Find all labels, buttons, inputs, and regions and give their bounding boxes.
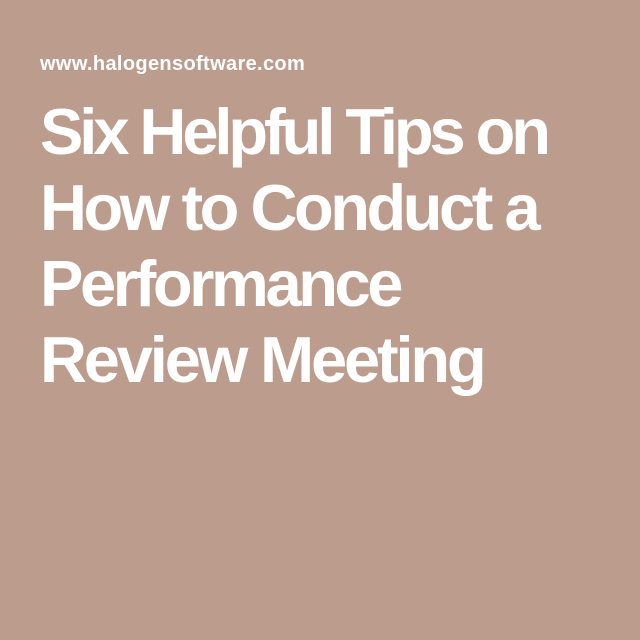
title: Six Helpful Tips on <box>40 95 547 168</box>
title: How to Conduct a <box>40 171 537 244</box>
website url: www.halogensoftware.com <box>40 53 305 75</box>
title: Performance <box>40 247 400 320</box>
title <box>40 95 547 396</box>
title: Review Meeting <box>40 323 484 396</box>
